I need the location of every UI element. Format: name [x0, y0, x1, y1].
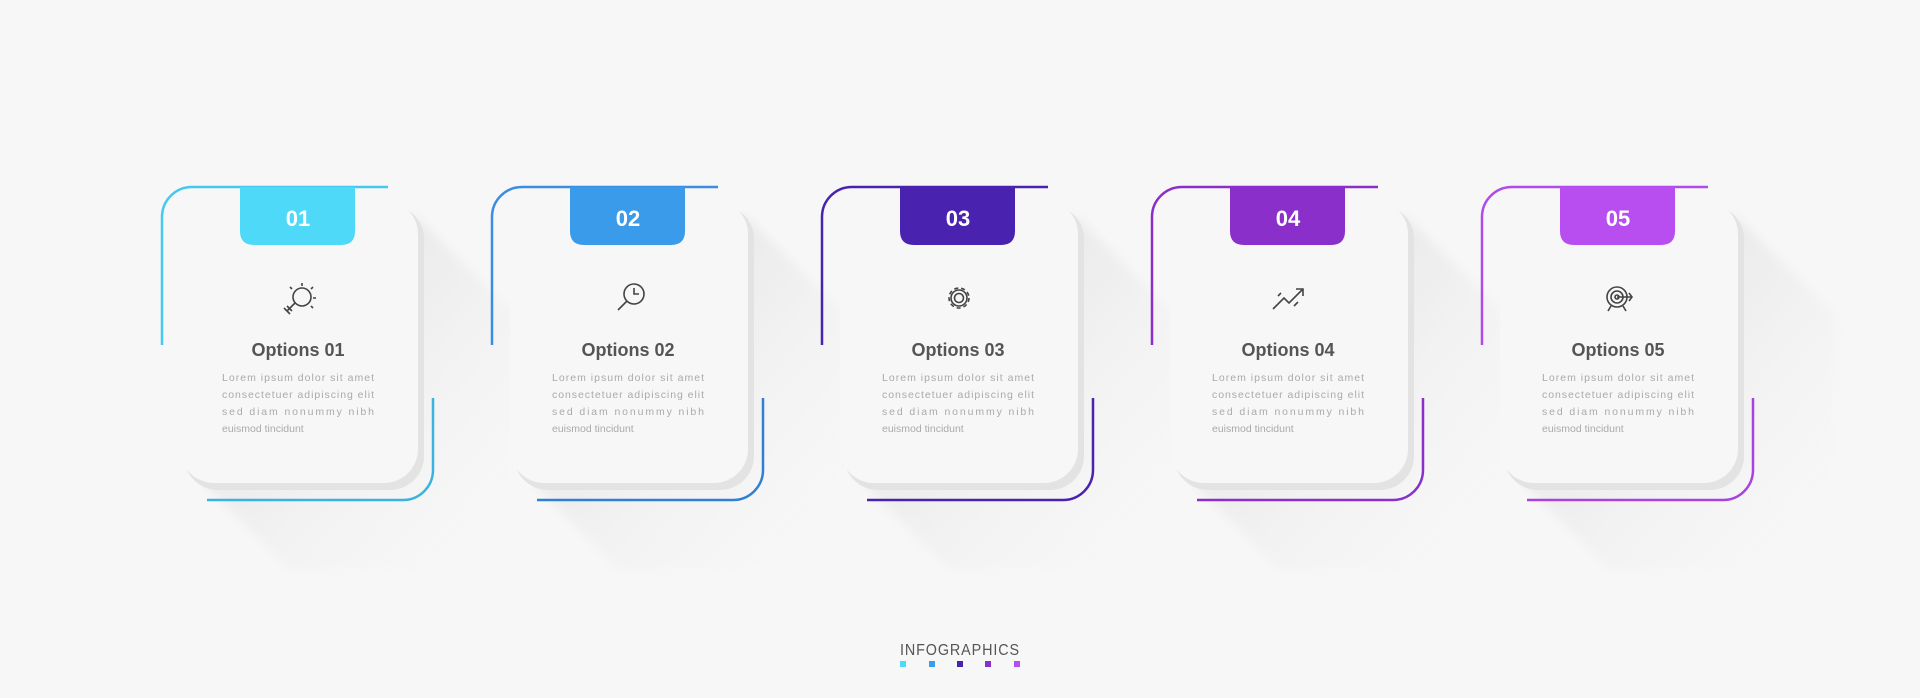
outline top-left: [162, 187, 388, 345]
outline bottom-right: [207, 398, 433, 500]
card 02: [492, 187, 845, 570]
card 03: [822, 187, 1175, 570]
card 02: Options 02: [581, 340, 675, 360]
card 03: Options 03: [911, 340, 1005, 360]
card 02: 02: [616, 206, 640, 231]
card 05: [1482, 187, 1835, 570]
card 04: 04: [1276, 206, 1301, 231]
card 03: 03: [946, 206, 970, 231]
card 01: 01: [286, 206, 310, 231]
footer: INFOGRAPHICS label: INFOGRAPHICS: [900, 642, 1020, 659]
title: Options 01: [251, 340, 345, 360]
tab 01: [240, 187, 355, 245]
card 04: [1152, 187, 1505, 570]
card 05: 05: [1606, 206, 1630, 231]
card 04: Options 04: [1241, 340, 1335, 360]
icon: bulb: [284, 283, 316, 314]
card 05: Options 05: [1571, 340, 1665, 360]
card 01: [162, 187, 515, 570]
footer: INFOGRAPHICS label: [900, 642, 1020, 667]
